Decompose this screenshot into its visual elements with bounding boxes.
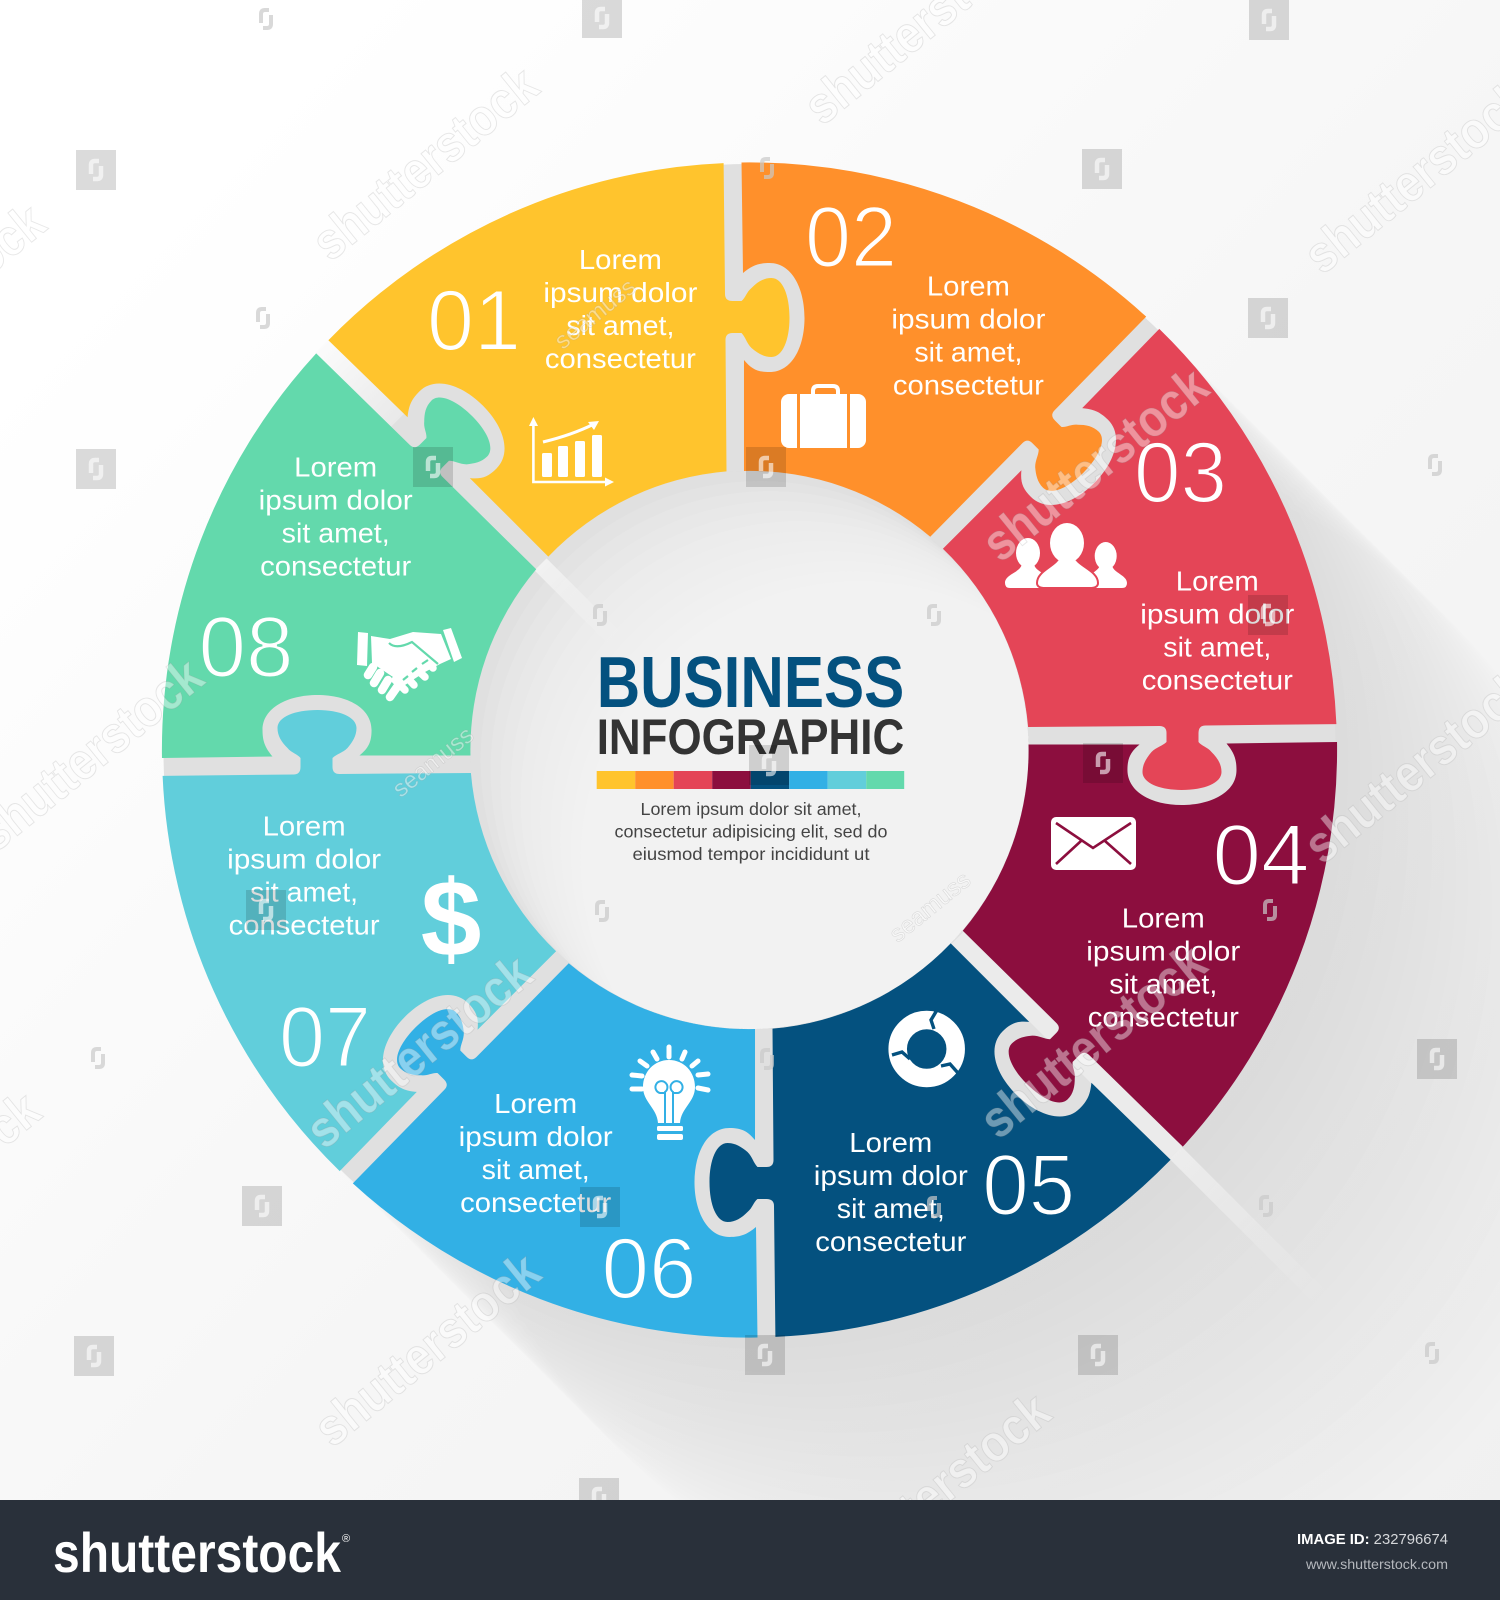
segment 07: teal [163,710,556,1171]
description text: Lorem ipsum dolor sit amet, [640,799,862,819]
description text [614,799,888,864]
text block 05: ipsum dolor [814,1160,968,1191]
text block 05: Lorem [849,1127,932,1158]
text block 03 [1140,566,1294,696]
number 05: 05 [982,1137,1075,1233]
text block 01: ipsum dolor [543,277,697,308]
segment 04: maroon [858,589,1462,1193]
segment 06: blue [306,858,911,1463]
text block 07: sit amet, [250,876,358,908]
text block 02: Lorem [927,271,1010,302]
text block 04 [1086,902,1240,1032]
text block 06: Lorem [494,1088,577,1119]
text block 04: Lorem [1122,902,1205,933]
centre disc with soft inner shadow [510,507,1028,1029]
stock watermarks: seamuss [549,273,641,355]
image id: IMAGE ID: 232796674 [1297,1531,1448,1548]
registered mark: ® [342,1533,350,1545]
icon: bar chart [529,417,614,486]
text block 08 [259,451,413,581]
text block 04: ipsum dolor [1086,935,1240,966]
text block 07: consectetur [229,910,380,940]
stock watermarks: shutterstock [971,357,1219,573]
text block 03: Lorem [1176,566,1259,597]
number 08: 08 [198,600,294,696]
icon: people [1005,523,1127,588]
text block 02: sit amet, [914,337,1022,368]
footer logo: shutterstock [53,1521,342,1584]
text block 04: consectetur [1088,1001,1239,1032]
stock watermarks: shutterstock [301,56,549,272]
stock watermarks: seamuss [387,721,479,803]
stock watermarks: shutterstock [295,944,543,1160]
text block 02: consectetur [893,370,1044,401]
gray gap ring beneath the puzzle pieces [164,164,1336,1336]
text block 07 [227,810,381,940]
text block 04: sit amet, [1109,968,1217,999]
text block 01: Lorem [579,244,662,275]
text block 01: consectetur [545,343,696,374]
stock watermarks: seamuss [884,866,976,948]
number 07: 07 [279,989,371,1085]
text block 08: sit amet, [282,517,390,548]
icon: cycle arrows [892,1010,958,1078]
text block 02: ipsum dolor [891,304,1045,335]
text block 03: sit amet, [1163,632,1271,663]
icon: dollar sign: $ [421,858,481,980]
light gap strokes and their projected stripes [315,338,1329,1306]
description text: eiusmod tempor incididunt ut [632,844,870,864]
stock watermarks: shutterstock [303,1242,551,1458]
text block 08: ipsum dolor [259,484,413,515]
segment 01: yellow [328,163,790,557]
text block 03: consectetur [1142,665,1293,696]
stock watermarks: shutterstock [969,934,1217,1150]
text block 07: Lorem [263,810,346,842]
segment 02: orange [588,37,1193,642]
number 01: 01 [427,273,521,369]
text block 08: consectetur [260,550,411,581]
text block 06: consectetur [460,1187,611,1218]
text block 02 [891,271,1045,401]
text block 06: ipsum dolor [459,1121,613,1152]
text block 06: sit amet, [482,1154,590,1185]
icon: envelope [1051,817,1136,870]
text block 07: ipsum dolor [227,844,381,874]
text block 08: Lorem [294,451,377,482]
number 06: 06 [602,1221,696,1317]
icon: handshake [357,628,462,697]
text block 01 [543,244,697,374]
heading: INFOGRAPHIC: INFOGRAPHIC [597,709,904,765]
segment 05: navy [710,943,1171,1337]
segment 08: green [37,307,641,911]
title block [597,643,904,864]
text block 05: sit amet, [837,1193,945,1224]
text block 05 [814,1127,968,1257]
text block 03: ipsum dolor [1140,599,1294,630]
text block 05: consectetur [815,1226,966,1257]
stock watermarks: shutterstock [813,1382,1061,1598]
colour strip [597,771,904,789]
icon: light bulb [632,1047,708,1140]
description text: consectetur adipisicing elit, sed do [614,822,888,842]
footer bar [0,1500,1500,1600]
heading: BUSINESS: BUSINESS [597,643,904,723]
number 02: 02 [805,189,897,285]
text block 06 [459,1088,613,1218]
icon: briefcase [781,386,866,448]
number 04: 04 [1212,808,1310,904]
number 03: 03 [1134,425,1227,521]
long shadow of the ring [174,175,1500,1600]
text block 01: sit amet, [566,310,674,341]
segment 03: red [943,329,1336,790]
website: www.shutterstock.com [1305,1556,1448,1572]
